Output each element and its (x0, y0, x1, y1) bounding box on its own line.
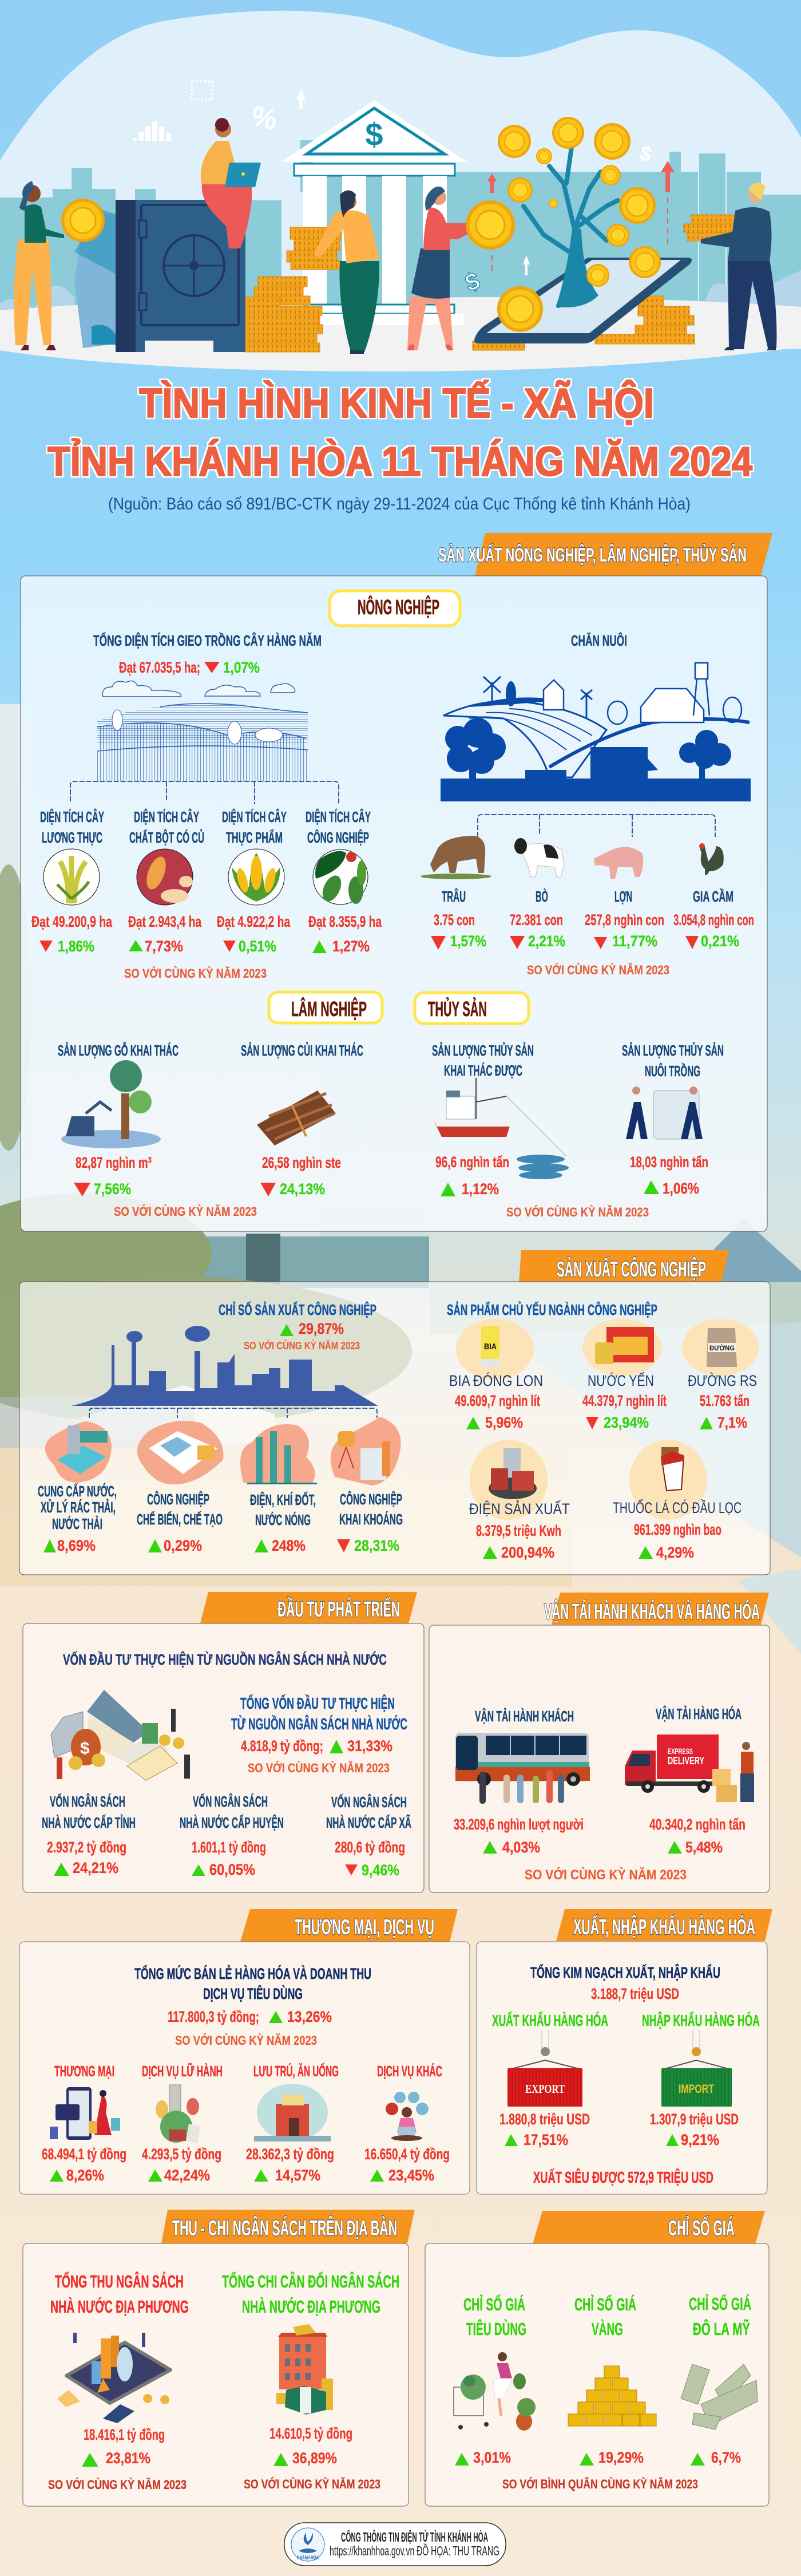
column: water supply (38, 1421, 117, 1554)
column: hospitality: 14,57% (275, 2167, 320, 2184)
heading: retail revenue: TỔNG MỨC BÁN LẺ HÀNG HÓA VÀ DOANH THU (134, 1964, 371, 1982)
panel: budget (23, 2243, 409, 2506)
bank building: $ (365, 116, 383, 152)
column: district budget: 60,05% (209, 1861, 255, 1878)
index value (244, 1320, 360, 1352)
product: electricity (469, 1440, 570, 1561)
total investment block: 31,33% (347, 1737, 392, 1755)
badge: agriculture: NÔNG NGHIỆP (358, 595, 439, 619)
column: freight transport (625, 1705, 754, 1856)
column: district budget: VỐN NGÂN SÁCH (193, 1793, 268, 1810)
total investment block: TỔNG VỐN ĐẦU TƯ THỰC HIỆN (240, 1694, 395, 1712)
item: wild catch: 96,6 nghìn tấn (435, 1153, 509, 1171)
column: cattle: 2,21% (528, 933, 565, 950)
footer text (330, 2528, 499, 2558)
column: import: 1.307,9 triệu USD (650, 2111, 739, 2128)
item: timber: 82,87 nghìn m³ (76, 1154, 152, 1171)
column: import: IMPORT (679, 2083, 714, 2096)
column: poultry: GIA CẦM (693, 888, 733, 905)
man with coin stack (701, 183, 777, 350)
column: dollar price index (681, 2293, 758, 2466)
column: water supply: CUNG CẤP NƯỚC, (38, 1483, 117, 1500)
column: cattle (510, 838, 565, 950)
product: canned beer: BIA (484, 1342, 497, 1352)
item: firewood: 24,13% (280, 1180, 325, 1198)
column: industrial crops: Đạt 8.355,9 ha (308, 913, 382, 930)
connector: crop tree (70, 781, 339, 804)
illustration: shopper with cart (454, 2352, 536, 2431)
column: expenditure: TỔNG CHI CÂN ĐỐI NGÂN SÁCH (222, 2271, 399, 2291)
note: compared with 2023: SO VỚI CÙNG KỲ NĂM 2023 (527, 963, 669, 977)
note: compared with 2023: SO VỚI CÙNG KỲ NĂM 2023 (114, 1204, 257, 1219)
column: power: NƯỚC NÓNG (255, 1511, 311, 1528)
total retail value: 13,26% (287, 2008, 332, 2025)
column: processing: 0,29% (164, 1537, 202, 1554)
product: bird's nest drink (582, 1319, 667, 1431)
product: electricity: ĐIỆN SẢN XUẤT (469, 1499, 570, 1518)
item: aquaculture: SẢN LƯỢNG THỦY SẢN (622, 1041, 724, 1059)
panel: import and export (477, 1942, 767, 2194)
column: food crops (31, 808, 113, 955)
connector: industry tree (89, 1408, 377, 1418)
person with laptop on safe (201, 118, 261, 248)
total crop value: Đạt 67.035,5 ha; (119, 659, 200, 676)
column: passenger transport: VẬN TẢI HÀNH KHÁCH (475, 1708, 574, 1725)
column: hospitality: 28.362,3 tỷ đồng (246, 2146, 334, 2163)
column: power: 248% (272, 1537, 306, 1554)
total investment block: 4.818,9 tỷ đồng; (241, 1737, 323, 1755)
item: timber: SẢN LƯỢNG GỖ KHAI THÁC (58, 1042, 179, 1059)
note: compared with 2023 average: SO VỚI BÌNH QUÂN CÙNG KỲ NĂM 2023 (502, 2477, 698, 2491)
column: power: ĐIỆN, KHÍ ĐỐT, (250, 1491, 316, 1508)
column: buffalo: 1,57% (450, 933, 486, 950)
item: firewood: SẢN LƯỢNG CỦI KHAI THÁC (241, 1041, 363, 1059)
heading: main products: SẢN PHẨM CHỦ YẾU NGÀNH CÔNG NGHIỆP (447, 1301, 657, 1318)
trade surplus: XUẤT SIÊU ĐƯỢC 572,9 TRIỆU USD (533, 2168, 713, 2186)
column: poultry: 3.054,8 nghìn con (673, 911, 754, 929)
column: other services: 23,45% (388, 2167, 434, 2184)
column: province budget: NHÀ NƯỚC CẤP TỈNH (42, 1814, 136, 1831)
heading: industrial production index: CHỈ SỐ SẢN XUẤT CÔNG NGHIỆP (219, 1301, 376, 1318)
column: starchy roots: CHẤT BỘT CÓ CỦ (129, 828, 204, 846)
column: poultry (673, 843, 754, 950)
decorative chart bars, percent and arrows (133, 81, 675, 297)
column: water supply: XỬ LÝ RÁC THẢI, (41, 1498, 116, 1516)
illustration: budget building and calculator (51, 1690, 190, 1780)
total investment block (231, 1694, 407, 1775)
total crop value: 1,07% (223, 659, 260, 676)
footer credit pill (284, 2523, 506, 2566)
column: food vegetables: THỰC PHẨM (226, 829, 283, 846)
column: industrial crops: CÔNG NGHIỆP (307, 829, 369, 846)
column: pigs: LỢN (614, 888, 632, 905)
section header: budget: THU - CHI NGÂN SÁCH TRÊN ĐỊA BÀN (172, 2215, 397, 2241)
column: water supply: 8,69% (57, 1537, 96, 1554)
total retail value: SO VỚI CÙNG KỲ NĂM 2023 (175, 2033, 317, 2048)
column: expenditure: SO VỚI CÙNG KỲ NĂM 2023 (244, 2477, 380, 2491)
item: timber (58, 1042, 179, 1198)
column: cattle: 72.381 con (510, 911, 563, 929)
column: commune budget: 9,46% (362, 1862, 399, 1879)
ground (0, 297, 801, 372)
column: consumer price index (454, 2294, 536, 2466)
illustration: travellers (479, 1770, 564, 1804)
product: cigarettes (613, 1440, 741, 1561)
column: processing (137, 1421, 223, 1554)
note: compared with 2023: SO VỚI CÙNG KỲ NĂM 2023 (124, 966, 267, 981)
column: export: XUẤT KHẨU HÀNG HÓA (492, 2012, 608, 2029)
badge: forestry: LÂM NGHIỆP (291, 997, 367, 1021)
column: import: 9,21% (681, 2131, 719, 2148)
item: aquaculture (622, 1041, 724, 1197)
product: cigarettes: 4,29% (656, 1544, 694, 1561)
decorative chart bars, percent and arrows: $ (636, 141, 655, 167)
column: food crops: LƯƠNG THỰC (42, 829, 102, 846)
decorative chart bars, percent and arrows: % (249, 99, 280, 136)
logo: Khanh Hoa (291, 2528, 324, 2561)
index value: 29,87% (299, 1320, 344, 1337)
column: other services: 16.650,4 tỷ đồng (364, 2146, 450, 2163)
phone and tree with coins (474, 117, 692, 343)
person with coin (14, 181, 105, 350)
column: expenditure: NHÀ NƯỚC ĐỊA PHƯƠNG (242, 2296, 380, 2317)
column: cattle: BÒ (536, 888, 548, 905)
column: freight transport: VẬN TẢI HÀNG HÓA (656, 1705, 741, 1722)
column: gold price index: 19,29% (598, 2449, 644, 2466)
product: refined sugar: 51.763 tấn (700, 1392, 750, 1409)
column: revenue: NHÀ NƯỚC ĐỊA PHƯƠNG (50, 2296, 189, 2317)
column: district budget: NHÀ NƯỚC CẤP HUYỆN (180, 1814, 284, 1831)
product: bird's nest drink: 23,94% (604, 1414, 649, 1431)
column: passenger transport: 33.209,6 nghìn lượt người (454, 1816, 584, 1833)
safe (116, 200, 245, 352)
panel: transport (429, 1625, 770, 1893)
illustration: bus (455, 1733, 590, 1786)
illustration: budget building and calculator: $ (80, 1739, 90, 1758)
column: consumer price index: CHỈ SỐ GIÁ (463, 2294, 525, 2314)
column: dollar price index: CHỈ SỐ GIÁ (689, 2293, 751, 2314)
item: aquaculture: 1,06% (663, 1180, 699, 1197)
product: electricity: 8.379,5 triệu Kwh (476, 1522, 561, 1539)
logo: Khanh Hoa: KHÁNH HÒA (297, 2554, 319, 2561)
product: canned beer: BIA ĐÓNG LON (449, 1372, 543, 1389)
column: buffalo: TRÂU (442, 888, 466, 905)
column: province budget: 2.937,2 tỷ đồng (47, 1839, 126, 1856)
column: revenue: 23,81% (106, 2449, 150, 2467)
column: passenger transport (454, 1708, 590, 1856)
column: hospitality: LƯU TRÚ, ĂN UỐNG (253, 2063, 339, 2080)
column: commune budget: 280,6 tỷ đồng (335, 1839, 405, 1856)
column: pigs: 11,77% (612, 933, 657, 950)
coin stacks centre (245, 227, 341, 352)
total investment block: SO VỚI CÙNG KỲ NĂM 2023 (248, 1761, 390, 1775)
note: compared with 2023: SO VỚI CÙNG KỲ NĂM 2023 (506, 1205, 649, 1219)
section header: agriculture, forestry, fishery (438, 533, 772, 576)
illustration: dollar bills (681, 2364, 758, 2429)
product: refined sugar: ĐƯỜNG (709, 1344, 735, 1352)
column: food vegetables: Đạt 4.922,2 ha (217, 913, 291, 930)
panel: agriculture, forestry, fishery (21, 576, 767, 1231)
decorative chart bars, percent and arrows: $ (462, 267, 483, 297)
column: travel services (142, 2063, 223, 2184)
column: poultry: 0,21% (701, 933, 739, 950)
heading: retail revenue (134, 1964, 371, 2002)
column: travel services: DỊCH VỤ LỮ HÀNH (142, 2063, 223, 2080)
product: bird's nest drink: 44.379,7 nghìn lít (582, 1392, 667, 1409)
column: freight transport: 40.340,2 nghìn tấn (649, 1816, 746, 1833)
column: consumer price index: TIÊU DÙNG (466, 2318, 526, 2339)
column: starchy roots: 7,73% (145, 938, 183, 955)
illustration: delivery truck: EXPRESS (668, 1747, 693, 1756)
column: food vegetables: 0,51% (239, 938, 276, 955)
column: other services (364, 2063, 450, 2184)
item: aquaculture: 18,03 nghìn tấn (630, 1153, 708, 1171)
column: pigs (585, 847, 664, 950)
footer text: CỔNG THÔNG TIN ĐIỆN TỬ TỈNH KHÁNH HÒA (341, 2528, 488, 2545)
section header: transport (544, 1593, 769, 1625)
section header: investment (200, 1592, 417, 1623)
column: food vegetables (217, 808, 291, 955)
product: cigarettes: 961.399 nghìn bao (634, 1521, 721, 1538)
column: export: 1.880,8 triệu USD (499, 2111, 590, 2128)
column: food crops: Đạt 49.200,9 ha (31, 913, 113, 930)
hero illustration: city, bank, safe, people, coin tree (0, 11, 801, 372)
title (47, 380, 752, 485)
heading: retail revenue: DỊCH VỤ TIÊU DÙNG (203, 1985, 303, 2002)
column: gold price index (568, 2294, 656, 2466)
column: province budget: VỐN NGÂN SÁCH (50, 1793, 125, 1810)
item: firewood: 26,58 nghìn ste (262, 1154, 341, 1171)
man in yellow (314, 190, 379, 354)
section header: industry (519, 1250, 729, 1282)
column: passenger transport: 4,03% (502, 1839, 540, 1856)
column: buffalo: 3.75 con (434, 911, 475, 929)
column: travel services: 4.293,5 tỷ đồng (142, 2146, 221, 2163)
section header: budget (161, 2210, 415, 2243)
note: compared with 2023: SO VỚI CÙNG KỲ NĂM 2023 (525, 1867, 687, 1883)
product: cigarettes: THUỐC LÁ CÓ ĐẦU LỌC (613, 1498, 741, 1516)
total retail value: 117.800,3 tỷ đồng; (168, 2008, 259, 2025)
product: refined sugar (682, 1319, 759, 1431)
woman in red (407, 187, 515, 350)
item: aquaculture: NUÔI TRỒNG (645, 1062, 700, 1080)
illustration: crop fields (96, 681, 308, 781)
column: commune budget (326, 1793, 411, 1879)
column: revenue: SO VỚI CÙNG KỲ NĂM 2023 (48, 2478, 187, 2492)
heading: livestock: CHĂN NUÔI (571, 632, 627, 649)
illustration: gold bars (568, 2366, 656, 2426)
column: commerce: 8,26% (66, 2167, 104, 2184)
product: canned beer: 49.609,7 nghìn lít (455, 1392, 540, 1409)
city skyline (0, 140, 801, 321)
section header: price index: CHỈ SỐ GIÁ (668, 2215, 735, 2241)
column: consumer price index: 3,01% (473, 2449, 511, 2466)
illustration: farm (441, 663, 751, 801)
item: wild catch: 1,12% (462, 1180, 499, 1198)
column: starchy roots (128, 808, 204, 955)
illustration: delivery truck (625, 1735, 754, 1802)
product: canned beer (449, 1319, 543, 1431)
footer text: https://khanhhoa.gov.vn ĐỒ HỌA: THU TRANG (330, 2543, 499, 2558)
money bills behind safe (74, 209, 117, 348)
badge: fishery (415, 993, 529, 1024)
total turnover value: 3.188,7 triệu USD (591, 1985, 679, 2002)
connector: livestock tree (478, 815, 715, 837)
badge: agriculture (330, 591, 460, 626)
product: refined sugar: ĐƯỜNG RS (688, 1372, 757, 1389)
panel: industry (19, 1282, 770, 1575)
heading: annual crop area: TỔNG DIỆN TÍCH GIEO TRỒNG CÂY HÀNG NĂM (93, 632, 322, 649)
column: commerce: THƯƠNG MẠI (54, 2063, 114, 2080)
column: gold price index: CHỈ SỐ GIÁ (574, 2294, 636, 2314)
badge: fishery: THỦY SẢN (428, 997, 487, 1021)
column: other services: DỊCH VỤ KHÁC (377, 2063, 442, 2080)
product: bird's nest drink: NƯỚC YẾN (588, 1372, 654, 1389)
column: export: EXPORT (525, 2082, 565, 2096)
hero light blob (0, 11, 801, 349)
column: commerce: 68.494,1 tỷ đồng (42, 2146, 126, 2163)
column: dollar price index: ĐÔ LA MỸ (693, 2318, 750, 2339)
column: mining: 28,31% (354, 1537, 399, 1554)
column: expenditure: 14.610,5 tỷ đồng (269, 2425, 352, 2442)
column: expenditure (222, 2271, 399, 2491)
panel: price index (425, 2243, 769, 2506)
product: refined sugar: 7,1% (717, 1414, 747, 1431)
heading: state budget investment: VỐN ĐẦU TƯ THỰC HIỆN TỪ NGUỒN NGÂN SÁCH NHÀ NƯỚC (63, 1651, 387, 1668)
column: starchy roots: DIỆN TÍCH CÂY (134, 808, 199, 825)
source line: (Nguồn: Báo cáo số 891/BC-CTK ngày 29-11-2024 của Cục Thống kê tỉnh Khánh Hòa) (108, 495, 691, 513)
panel: trade and services (19, 1942, 470, 2194)
column: industrial crops: DIỆN TÍCH CÂY (306, 808, 371, 825)
column: freight transport: 5,48% (685, 1839, 723, 1856)
badge: forestry (269, 992, 382, 1023)
column: mining: CÔNG NGHIỆP (340, 1491, 402, 1508)
column: commune budget: VỐN NGÂN SÁCH (331, 1793, 407, 1811)
column: industrial crops: 1,27% (332, 938, 370, 955)
section header: investment: ĐẦU TƯ PHÁT TRIỂN (277, 1596, 400, 1622)
column: gold price index: VÀNG (592, 2319, 623, 2339)
column: processing: CÔNG NGHIỆP (147, 1491, 209, 1508)
section header: trade and services: THƯƠNG MẠI, DỊCH VỤ (295, 1915, 434, 1939)
item: wild catch: KHAI THÁC ĐƯỢC (444, 1062, 522, 1079)
column: commerce (42, 2063, 126, 2184)
column: province budget: 24,21% (73, 1859, 118, 1876)
column: commune budget: NHÀ NƯỚC CẤP XÃ (326, 1814, 411, 1831)
item: firewood (241, 1041, 363, 1198)
column: industrial crops (306, 808, 382, 955)
column: district budget (180, 1793, 284, 1878)
column: starchy roots: Đạt 2.943,4 ha (128, 913, 202, 930)
total investment block: TỪ NGUỒN NGÂN SÁCH NHÀ NƯỚC (231, 1715, 407, 1733)
column: processing: CHẾ BIẾN, CHẾ TẠO (137, 1511, 223, 1528)
column: travel services: 42,24% (164, 2167, 210, 2184)
column: expenditure: 36,89% (292, 2449, 337, 2467)
column: import (642, 2012, 760, 2148)
product: canned beer: 5,96% (485, 1414, 523, 1431)
column: dollar price index: 6,7% (711, 2449, 741, 2466)
illustration: building and banknotes (276, 2324, 333, 2415)
index value: SO VỚI CÙNG KỲ NĂM 2023 (244, 1340, 360, 1352)
item: wild catch: SẢN LƯỢNG THỦY SẢN (432, 1041, 534, 1059)
item: timber: 7,56% (94, 1180, 131, 1198)
column: food crops: 1,86% (58, 938, 94, 955)
column: pigs: 257,8 nghìn con (585, 911, 664, 929)
item: wild catch (432, 1041, 569, 1198)
column: water supply: NƯỚC THẢI (52, 1515, 102, 1532)
illustration: delivery truck: DELIVERY (668, 1755, 704, 1767)
column: food vegetables: DIỆN TÍCH CÂY (222, 808, 287, 825)
bank building (281, 100, 467, 325)
column: mining: KHAI KHOÁNG (339, 1511, 403, 1528)
column: buffalo (421, 836, 491, 950)
column: food crops: DIỆN TÍCH CÂY (40, 808, 104, 825)
column: revenue: TỔNG THU NGÂN SÁCH (55, 2271, 184, 2291)
title: TÌNH HÌNH KINH TẾ - XÃ HỘI (139, 380, 654, 426)
column: mining (331, 1417, 403, 1554)
section header: price index (533, 2211, 765, 2244)
column: power (240, 1424, 317, 1554)
product: electricity: 200,94% (501, 1544, 554, 1561)
panel: investment (23, 1623, 424, 1893)
column: hospitality (246, 2063, 339, 2184)
illustration: factory skyline (72, 1326, 378, 1406)
column: province budget (42, 1793, 136, 1876)
coin stacks right (473, 215, 739, 350)
total retail value (168, 2008, 332, 2048)
column: district budget: 1.601,1 tỷ đồng (192, 1839, 266, 1856)
illustration: tablet with charts (57, 2333, 170, 2423)
section header: trade and services (240, 1909, 458, 1942)
column: revenue: 18.416,1 tỷ đồng (84, 2426, 165, 2443)
section header: import and export (556, 1909, 772, 1941)
column: export: 17,51% (524, 2131, 568, 2148)
column: revenue (48, 2271, 189, 2492)
column: export (492, 2012, 608, 2148)
